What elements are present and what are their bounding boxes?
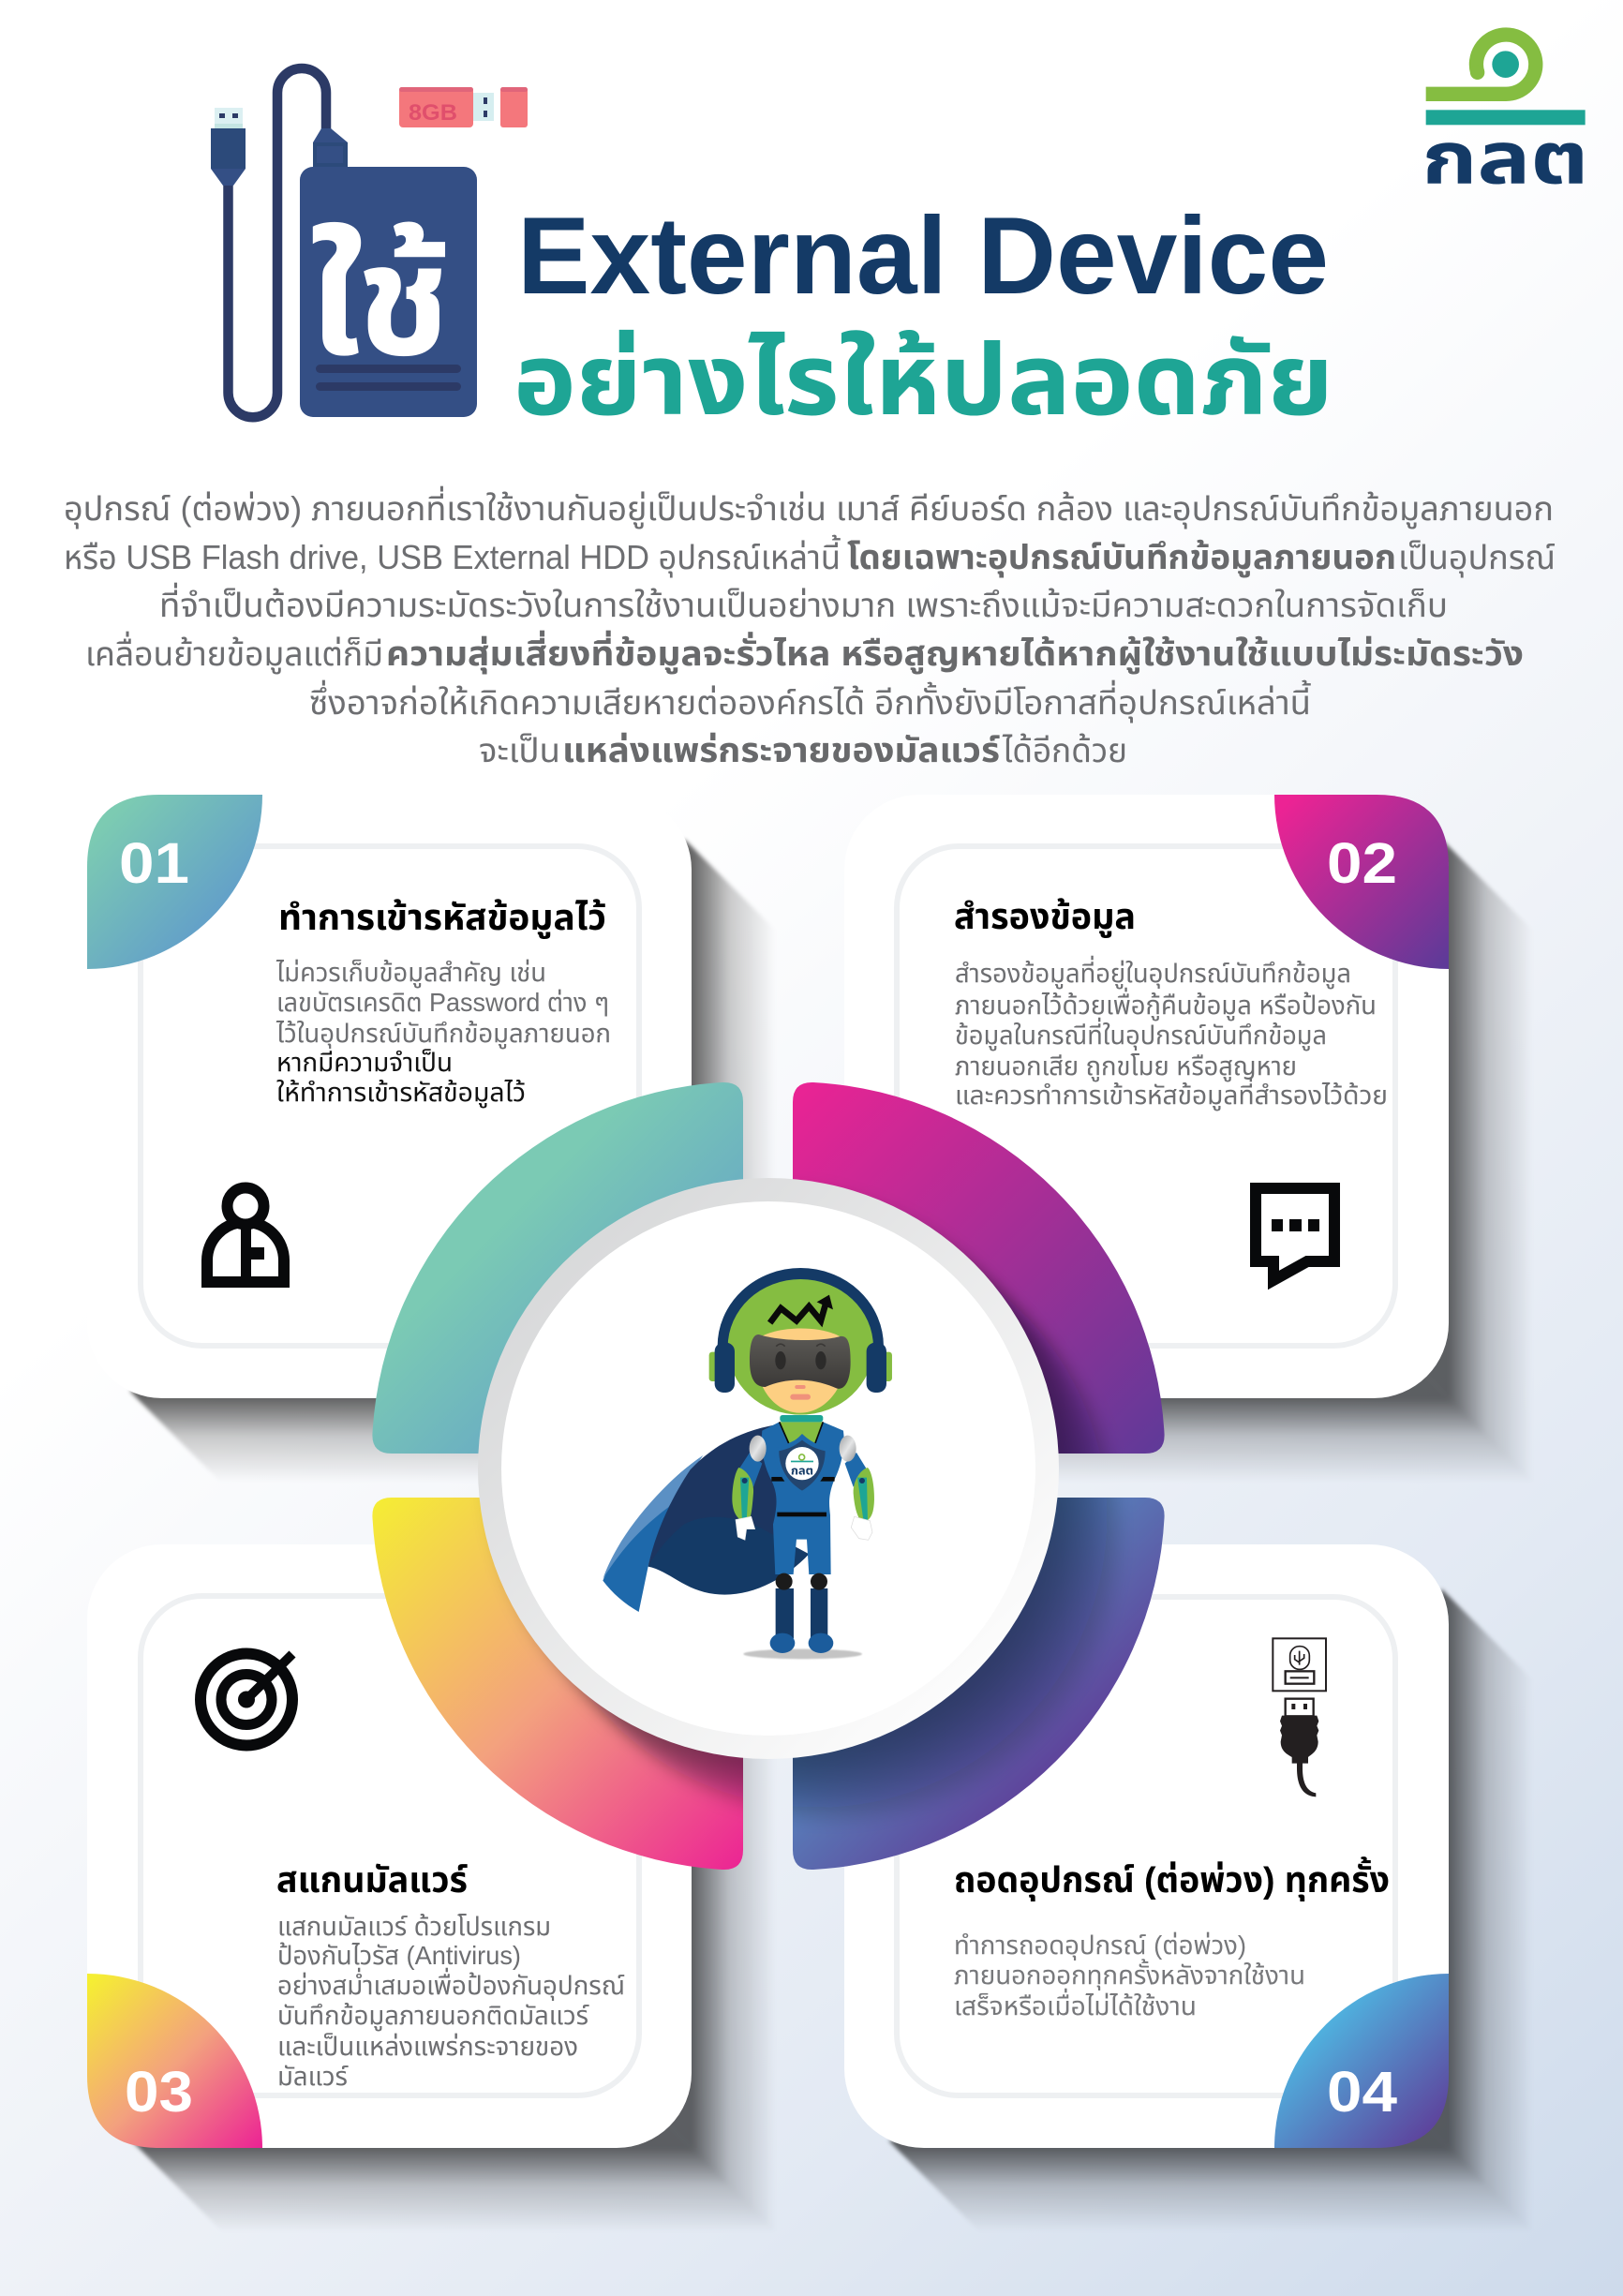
body text 02 — [955, 955, 1388, 1111]
illustration: external hard drive with cable and USB stick — [211, 68, 528, 417]
icon: target — [201, 1653, 292, 1745]
heading 03: สแกนมัลแวร์ — [276, 1861, 468, 1901]
body text 02: สำรองข้อมูลที่อยู่ในอุปกรณ์บันทึกข้อมูล — [955, 955, 1351, 990]
heading: word on drive: ใช้ — [309, 214, 450, 388]
logo: SEC Thailand: กลต — [1422, 119, 1588, 200]
icon: drive connector — [313, 128, 348, 167]
icon: cable — [229, 68, 326, 417]
badge 02: 02 — [1327, 831, 1397, 895]
icon: USB port and plug — [1273, 1638, 1326, 1797]
body text 02: ภายนอกไว้ด้วยเพื่อกู้คืนข้อมูล หรือป้องกัน — [955, 987, 1377, 1021]
badge 02 — [1274, 795, 1449, 969]
body text 02: และควรทำการเข้ารหัสข้อมูลที่สำรองไว้ด้วย — [955, 1077, 1388, 1111]
icon: hard drive body — [300, 167, 477, 417]
intro paragraph: อุปกรณ์ (ต่อพ่วง) ภายนอกที่เราใช้งานกันอยู่เป็นประจำเช่น เมาส์ คีย์บอร์ด กล้อง และอุปกรณ์บันทึกข้อมูลภายนอก — [64, 485, 1554, 529]
intro paragraph: เคลื่อนย้ายข้อมูลแต่ก็มี — [85, 631, 383, 674]
badge 01: 01 — [119, 831, 189, 895]
panel 03: scan malware — [87, 1544, 776, 2232]
panel 04: unplug device — [844, 1544, 1533, 2232]
badge 03 — [87, 1974, 262, 2148]
arc: teal top-left — [372, 1082, 743, 1454]
body text 04 — [954, 1931, 1305, 2020]
body text 01: หากมีความจำเป็น — [276, 1048, 453, 1077]
intro paragraph: ความสุ่มเสี่ยงที่ข้อมูลจะรั่วไหล หรือสูญหายได้หากผู้ใช้งานใช้แบบไม่ระมัดระวัง — [386, 630, 1524, 674]
body text 03: และเป็นแหล่งแพร่กระจายของ — [277, 2032, 578, 2061]
badge 04 — [1274, 1974, 1449, 2148]
intro paragraph: โดยเฉพาะอุปกรณ์บันทึกข้อมูลภายนอก — [847, 538, 1396, 577]
intro paragraph: หรือ USB Flash drive, USB External HDD อุปกรณ์เหล่านี้ — [64, 534, 841, 577]
intro paragraph: จะเป็น — [479, 731, 560, 769]
body text 04: ทำการถอดอุปกรณ์ (ต่อพ่วง) — [954, 1931, 1246, 1961]
title — [514, 194, 1333, 436]
body text 04: ภายนอกออกทุกครั้งหลังจากใช้งาน — [954, 1959, 1305, 1990]
body text 01: เลขบัตรเครดิต Password ต่าง ๆ — [276, 988, 609, 1017]
body text 03: ป้องกันไวรัส (Antivirus) — [277, 1941, 521, 1970]
arc: magenta top-right — [793, 1082, 1165, 1454]
title: External Device — [517, 194, 1329, 317]
mascot: caped superhero: กลต — [791, 1464, 813, 1477]
body text 03: อย่างสม่ำเสมอเพื่อป้องกันอุปกรณ์ — [277, 1967, 625, 2001]
body text 02: ภายนอกเสีย ถูกขโมย หรือสูญหาย — [955, 1051, 1297, 1082]
body text 03: มัลแวร์ — [277, 2062, 349, 2091]
panel 02: backup data — [844, 795, 1533, 1483]
body text 04: เสร็จหรือเมื่อไม่ได้ใช้งาน — [954, 1988, 1197, 2020]
icon: USB plug — [211, 108, 246, 186]
logo: SEC Thailand — [1422, 35, 1588, 200]
arc: blue-purple bottom-right — [793, 1498, 1165, 1870]
subtitle: อย่างไรให้ปลอดภัย — [514, 325, 1333, 436]
body text 01: ไม่ควรเก็บข้อมูลสำคัญ เช่น — [275, 958, 546, 989]
heading 04: ถอดอุปกรณ์ (ต่อพ่วง) ทุกครั้ง — [954, 1856, 1390, 1901]
body text 03 — [277, 1912, 625, 2091]
arc: yellow-pink bottom-left — [372, 1498, 743, 1870]
intro paragraph: เป็นอุปกรณ์ — [1398, 538, 1556, 577]
body text 03: แสกนมัลแวร์ ด้วยโปรแกรม — [277, 1912, 551, 1941]
panel 01: encrypt data — [87, 795, 776, 1483]
body text 01 — [275, 958, 611, 1109]
intro paragraph: ซึ่งอาจก่อให้เกิดความเสียหายต่อองค์กรได้ อีกทั้งยังมีโอกาสที่อุปกรณ์เหล่านี้ — [309, 679, 1311, 723]
heading 02: สำรองข้อมูล — [954, 898, 1136, 938]
circle frame — [478, 1178, 1059, 1759]
icon: chat bubble — [1256, 1188, 1334, 1280]
body text 01: ไว้ในอุปกรณ์บันทึกข้อมูลภายนอก — [275, 1019, 611, 1050]
body text 02: ข้อมูลในกรณีที่ในอุปกรณ์บันทึกข้อมูล — [955, 1017, 1327, 1051]
body text 03: บันทึกข้อมูลภายนอกติดมัลแวร์ — [277, 2001, 589, 2032]
centre graphic: four gradient arcs and mascot circle — [372, 1082, 1165, 1870]
body text 01: ให้ทำการเข้ารหัสข้อมูลไว้ — [276, 1078, 526, 1109]
mascot: caped superhero — [603, 1274, 892, 1659]
intro paragraph: ที่จำเป็นต้องมีความระมัดระวังในการใช้งานเป็นอย่างมาก เพราะถึงแม้จะมีความสะดวกในการจัดเก็บ — [159, 582, 1448, 624]
icon: person — [207, 1188, 284, 1282]
badge 04: 04 — [1327, 2060, 1397, 2124]
badge 01 — [87, 795, 262, 969]
heading 01: ทำการเข้ารหัสข้อมูลไว้ — [278, 899, 606, 939]
intro paragraph: ได้อีกด้วย — [1002, 731, 1127, 769]
badge 03: 03 — [125, 2060, 193, 2124]
icon: USB stick — [399, 87, 528, 127]
icon: USB stick: 8GB — [409, 100, 457, 126]
intro paragraph — [64, 485, 1556, 769]
intro paragraph: แหล่งแพร่กระจายของมัลแวร์ — [562, 731, 1000, 769]
